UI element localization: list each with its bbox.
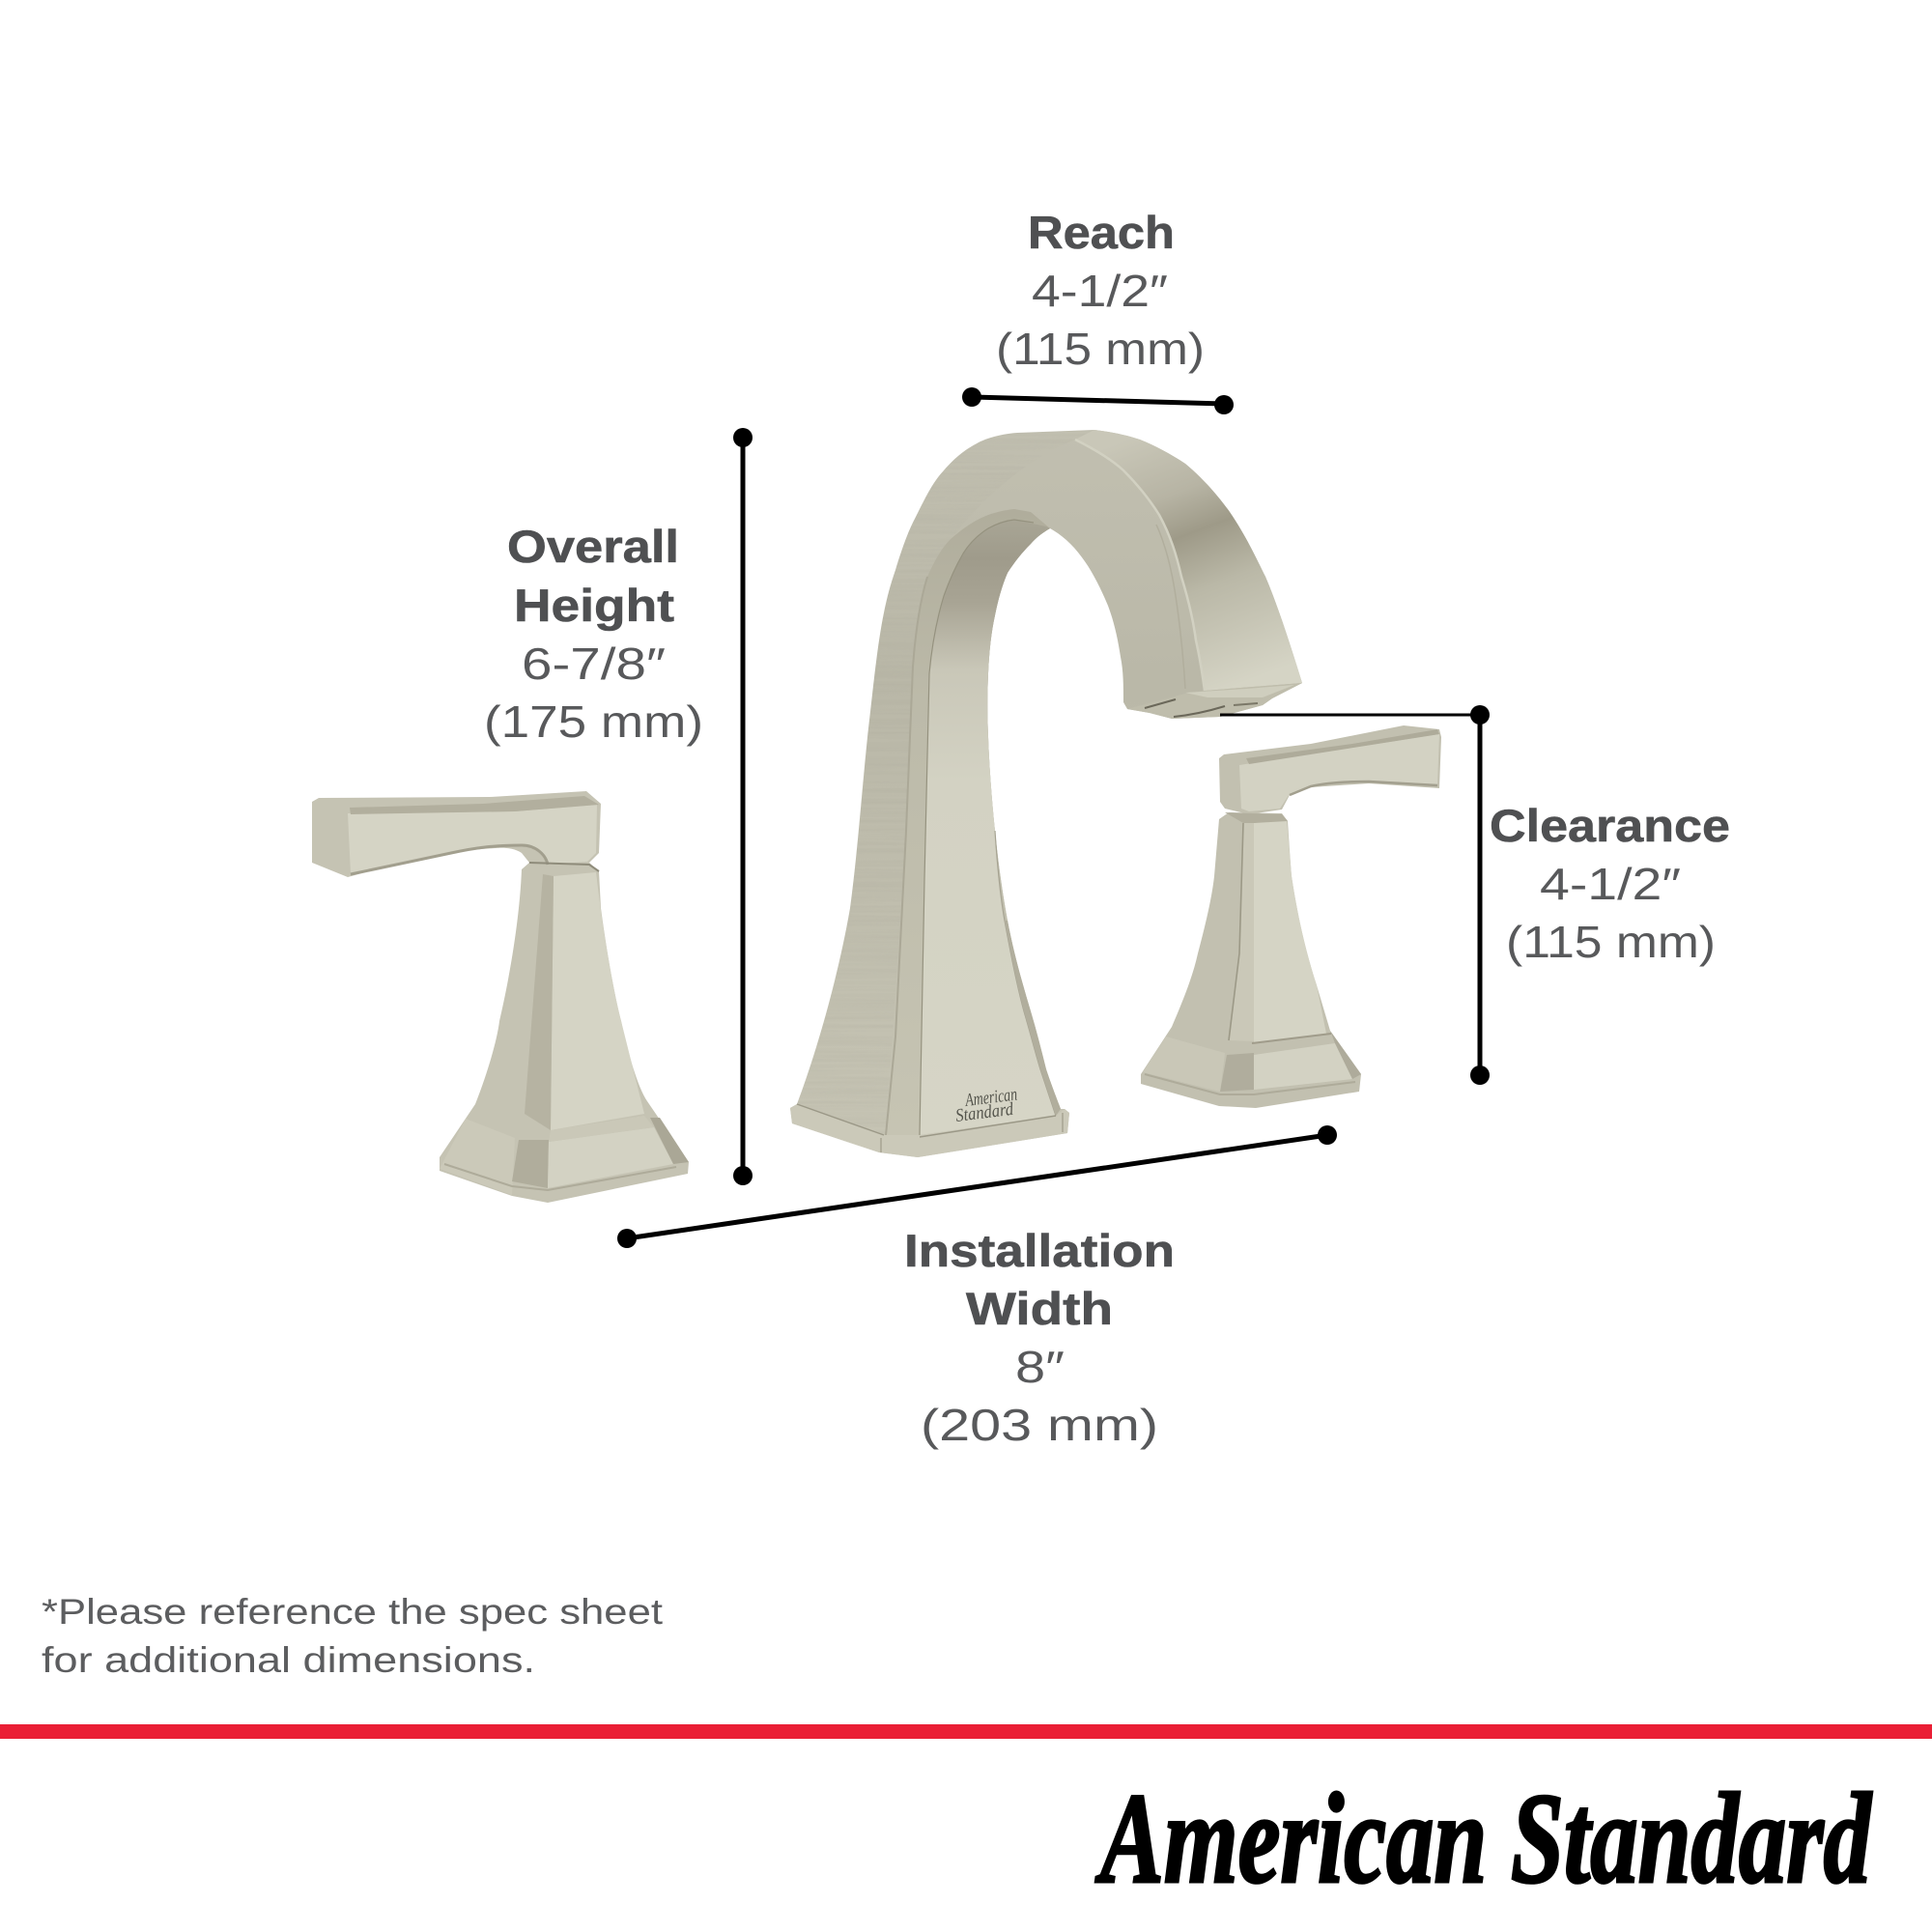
label: overall height: Height	[514, 580, 674, 631]
label: clearance: Clearance	[1490, 800, 1730, 851]
label: installation width: Installation	[904, 1225, 1175, 1276]
label: reach: Reach	[1028, 207, 1175, 258]
label: overall height: (175 mm)	[484, 696, 703, 747]
label: overall height: Overall	[507, 521, 679, 572]
dimension line: overall height	[733, 428, 753, 1185]
red divider bar	[0, 1724, 1932, 1739]
left handle	[312, 791, 689, 1203]
spout	[782, 425, 1302, 1157]
dimension line: clearance	[1220, 705, 1490, 1085]
footnote	[42, 1592, 664, 1680]
dimension line: reach	[962, 387, 1234, 414]
label: reach: 4-1/2″	[1032, 266, 1168, 316]
label: clearance	[1490, 800, 1730, 967]
label: clearance: (115 mm)	[1506, 917, 1716, 967]
label: installation width	[904, 1225, 1175, 1450]
dimension line: installation width	[617, 1125, 1337, 1248]
engraved faucet logo: American	[963, 1085, 1018, 1111]
label: clearance: 4-1/2″	[1540, 859, 1681, 909]
footnote: for additional dimensions.	[42, 1640, 535, 1680]
faucet illustration	[312, 425, 1441, 1203]
label: overall height: 6-7/8″	[522, 639, 666, 689]
footnote: *Please reference the spec sheet	[42, 1592, 664, 1632]
label: installation width: 8″	[1015, 1342, 1065, 1392]
label: installation width: (203 mm)	[921, 1400, 1158, 1450]
label: overall height	[484, 521, 703, 747]
label: reach	[996, 207, 1205, 374]
label: installation width: Width	[966, 1283, 1113, 1334]
label: reach: (115 mm)	[996, 324, 1205, 374]
right handle	[1141, 725, 1441, 1108]
engraved faucet logo second line: Standard	[954, 1099, 1015, 1126]
